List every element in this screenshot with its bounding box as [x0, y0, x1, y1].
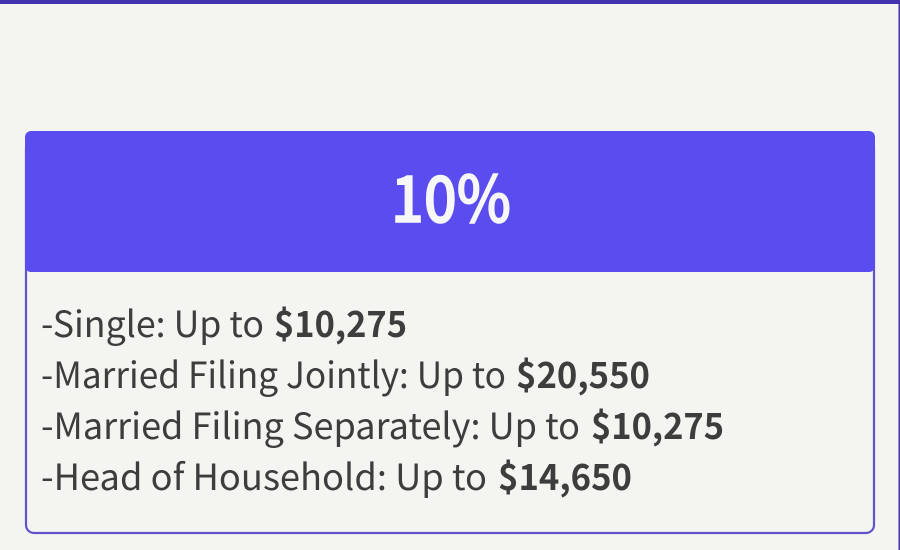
- line: single: [41, 296, 407, 348]
- line: married filing separately: -Married Filing Separately: Up to: [41, 398, 580, 450]
- line: head of household: -Head of Household: Up to: [41, 449, 487, 501]
- heading band: [25, 131, 875, 272]
- line: married filing jointly: -Married Filing Jointly: Up to: [41, 347, 506, 399]
- line: married filing separately: $10,275: [591, 398, 724, 450]
- heading: 10%: 10%: [391, 149, 511, 241]
- panel outline: [26, 140, 874, 533]
- line: married filing jointly: $20,550: [516, 347, 650, 399]
- panel: 10% bracket card: [25, 131, 875, 533]
- text block: income limits: [41, 296, 724, 501]
- line: single: -Single: Up to: [41, 296, 264, 348]
- line: head of household: $14,650: [498, 449, 632, 501]
- line: single: $10,275: [274, 296, 407, 348]
